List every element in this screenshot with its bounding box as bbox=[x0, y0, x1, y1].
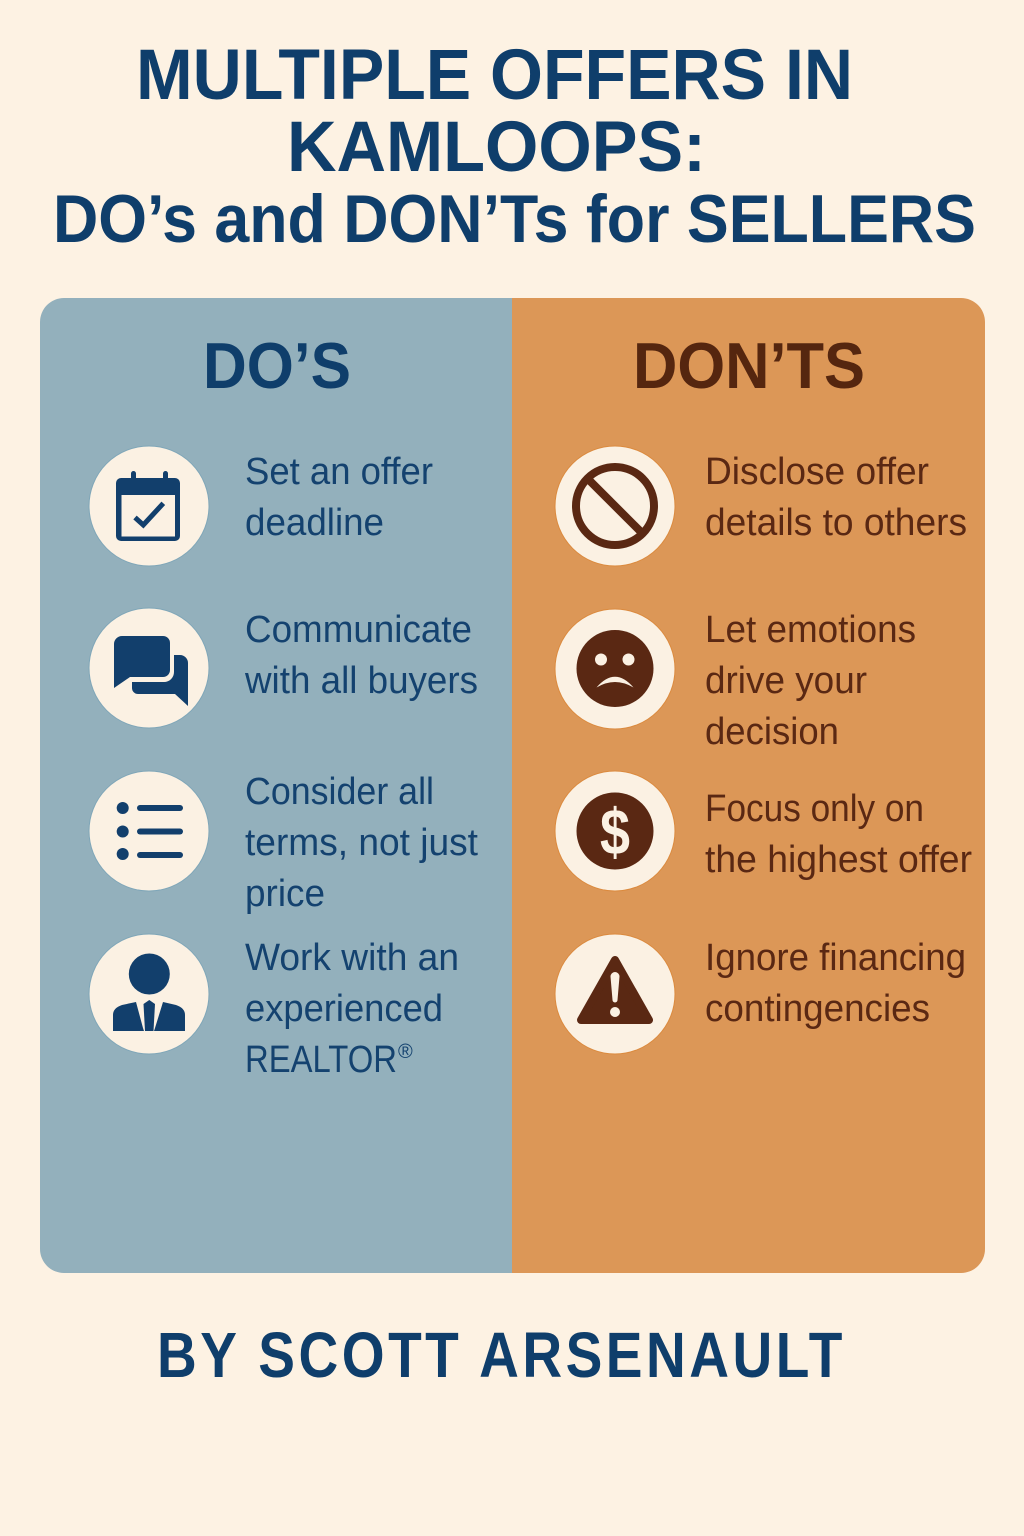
item: let emotions drive: decision bbox=[705, 711, 839, 753]
item: work with a realtor: REALTOR bbox=[245, 1039, 397, 1081]
icon: prohibited sign bbox=[576, 467, 654, 545]
item: communicate with all buyers: Communicate bbox=[245, 609, 472, 651]
item: focus on highest offer bbox=[555, 771, 972, 891]
icon: warning triangle bbox=[581, 960, 649, 1020]
item: work with a realtor bbox=[89, 934, 459, 1081]
item: work with a realtor: Work with an bbox=[245, 937, 459, 979]
item: consider all terms: Consider all bbox=[245, 771, 434, 813]
panel: do's bbox=[40, 298, 512, 1273]
icon: person in suit bbox=[113, 954, 185, 1031]
item: work with a realtor: ® bbox=[398, 1041, 413, 1063]
title: MULTIPLE OFFERS IN bbox=[136, 36, 853, 115]
item: set an offer deadline: deadline bbox=[245, 502, 384, 544]
icon: chat bubbles bbox=[114, 636, 188, 706]
item: ignore financing contingencies: contingencies bbox=[705, 988, 930, 1030]
item: consider all terms: terms, not just bbox=[245, 822, 478, 864]
icon: calendar bbox=[116, 471, 180, 541]
item: consider all terms: price bbox=[245, 873, 325, 915]
item: consider all terms bbox=[89, 771, 478, 915]
heading: don'ts: DON’TS bbox=[633, 329, 865, 402]
item: focus on highest offer: the highest offer bbox=[705, 839, 972, 881]
item: disclose offer details bbox=[555, 446, 967, 566]
item: let emotions drive: Let emotions bbox=[705, 609, 916, 651]
icon: dollar coin: $ bbox=[600, 795, 630, 868]
item: disclose offer details: details to others bbox=[705, 502, 967, 544]
byline: BY SCOTT ARSENAULT bbox=[157, 1319, 842, 1391]
title: KAMLOOPS: bbox=[287, 108, 706, 187]
heading: do's: DO’S bbox=[203, 329, 351, 402]
item: let emotions drive: drive your bbox=[705, 660, 867, 702]
item: work with a realtor: experienced bbox=[245, 988, 443, 1030]
item: set an offer deadline bbox=[89, 446, 433, 566]
icon: dollar coin bbox=[576, 792, 654, 870]
item: ignore financing contingencies bbox=[555, 934, 966, 1054]
item: let emotions drive bbox=[555, 609, 916, 753]
icon: sad face bbox=[576, 630, 654, 707]
panel: don'ts bbox=[512, 298, 985, 1273]
item: disclose offer details: Disclose offer bbox=[705, 451, 929, 493]
item: communicate with all buyers bbox=[89, 608, 478, 728]
item: focus on highest offer: Focus only on bbox=[705, 788, 924, 830]
icon: list bbox=[117, 802, 183, 860]
title bbox=[53, 36, 976, 257]
item: ignore financing contingencies: Ignore financing bbox=[705, 937, 966, 979]
item: communicate with all buyers: with all buyers bbox=[244, 660, 478, 702]
item: set an offer deadline: Set an offer bbox=[245, 451, 433, 493]
